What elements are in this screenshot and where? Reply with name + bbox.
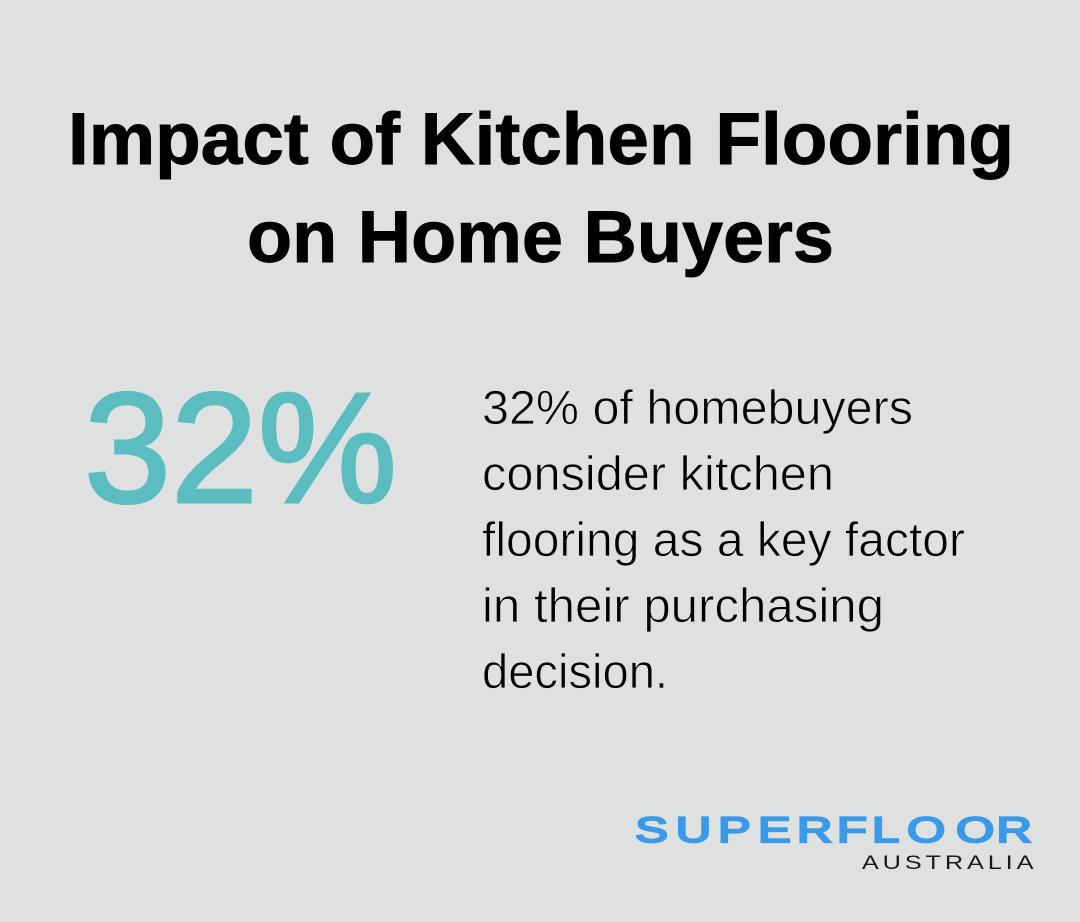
- title: [68, 99, 1014, 278]
- description text block: consider kitchen: [482, 448, 834, 501]
- big statistic: 32%: 32%: [84, 361, 397, 536]
- title: Impact of Kitchen Flooring: [68, 99, 1014, 180]
- title: on Home Buyers: [247, 197, 834, 278]
- description text block: in their purchasing: [482, 580, 884, 633]
- logo wordmark: SUPERFLOOR: SUPERFLOOR: [635, 811, 1032, 850]
- logo wordmark: AUSTRALIA: AUSTRALIA: [862, 852, 1035, 873]
- description text block: 32% of homebuyers: [482, 382, 913, 435]
- description text block: flooring as a key factor: [482, 514, 965, 567]
- logo: Superfloor Australia: [635, 811, 1035, 873]
- description text block: [482, 382, 965, 699]
- description text block: decision.: [482, 646, 668, 699]
